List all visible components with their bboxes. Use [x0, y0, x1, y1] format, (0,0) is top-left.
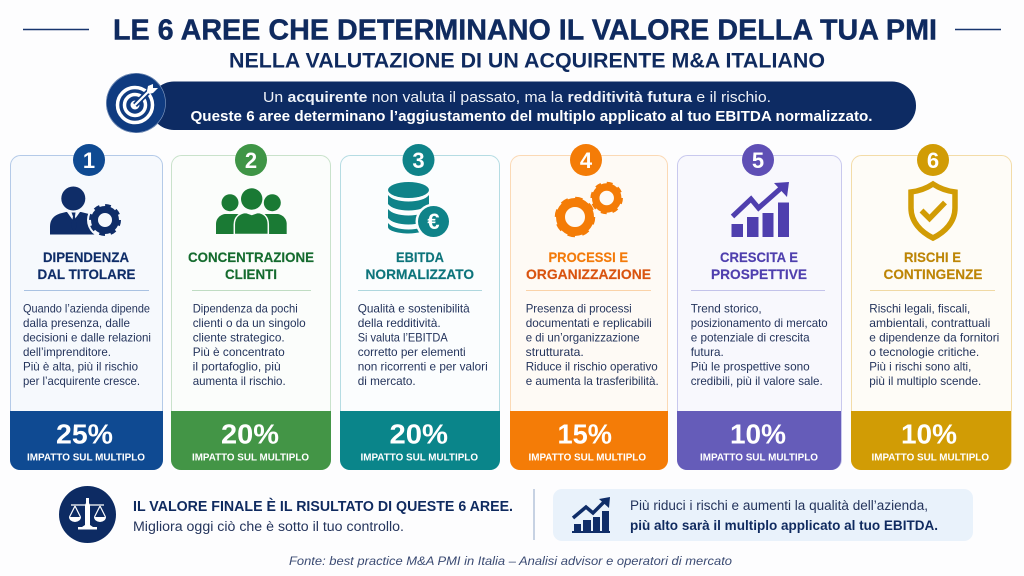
card body text: cliente strategico.: [193, 330, 285, 344]
badge 3: [402, 144, 434, 176]
callout text: più alto sarà il multiplo applicato al tuo EBITDA.: [630, 518, 938, 533]
card body text: futura.: [691, 345, 724, 359]
icon: gears: [557, 184, 621, 235]
card body text: Riduce il rischio operativo: [526, 360, 658, 374]
title: LE 6 AREE CHE DETERMINANO IL VALORE DELLA TUA PMI: [113, 14, 937, 46]
card body text: [691, 302, 828, 388]
card body text: credibili, più il valore sale.: [691, 374, 823, 388]
card body text: Dipendenza da pochi: [193, 302, 298, 316]
card heading: PROSPETTIVE: [711, 266, 807, 282]
icon: target: [106, 73, 166, 133]
closing statement: [133, 498, 513, 534]
card body text: [358, 302, 488, 388]
panel: rischi e contingenze: [851, 144, 1012, 470]
impact band 25%: 25%: [56, 418, 113, 450]
card body text: e dipendenze da fornitori: [869, 330, 999, 344]
icon: person with gear: [50, 186, 123, 238]
card heading: CLIENTI: [225, 266, 277, 282]
icon: shield with check: [911, 184, 955, 238]
card body text: [526, 302, 659, 388]
badge 1: [73, 144, 105, 176]
card body text: documentati e replicabili: [526, 316, 652, 330]
card body text: aumenta il rischio.: [193, 374, 286, 388]
impact band 25%: [10, 411, 163, 470]
banner text line 2: Queste 6 aree determinano l’aggiustamento del multiplo applicato al tuo EBITDA normalizzato.: [190, 108, 873, 125]
icon: chart: [572, 497, 610, 533]
badge 4: [570, 144, 602, 176]
impact band 10%: 10%: [901, 418, 957, 450]
card body text: [193, 302, 306, 388]
card body text: e aumenta la trasferibilità.: [526, 374, 659, 388]
card body text: clienti o da un singolo: [193, 316, 306, 330]
badge 5: [742, 144, 774, 176]
impact band 10%: IMPATTO SUL MULTIPLO: [700, 452, 818, 464]
card heading: [711, 249, 807, 282]
impact band 10%: [851, 411, 1011, 470]
badge 6: [917, 144, 949, 176]
panel: processi e organizzazione: [510, 144, 668, 470]
panel: ebitda normalizzato: [340, 144, 500, 470]
closing statement: Migliora oggi ciò che è sotto il tuo controllo.: [133, 519, 404, 534]
impact band 10%: [677, 411, 841, 470]
card body text: Più è concentrato: [193, 345, 285, 359]
subtitle: NELLA VALUTAZIONE DI UN ACQUIRENTE M&A ITALIANO: [229, 48, 825, 72]
card body text: per l’acquirente cresce.: [23, 374, 140, 388]
card body text: Qualità e sostenibilità: [358, 302, 470, 316]
banner text line 1: Un acquirente non valuta il passato, ma la redditività futura e il rischio.: [263, 89, 771, 106]
impact band 20%: [171, 411, 331, 470]
card body text: e di un’organizzazione: [526, 330, 640, 344]
card body text: [869, 302, 999, 388]
impact band 15%: IMPATTO SUL MULTIPLO: [528, 452, 646, 464]
card heading: RISCHI E: [904, 249, 961, 265]
card body text: il portafoglio, più: [193, 360, 281, 374]
icon: coins with euro: €: [427, 209, 440, 234]
card body text: Trend storico,: [691, 302, 762, 316]
card heading: ORGANIZZAZIONE: [526, 266, 651, 282]
card body text: Più le prospettive sono: [691, 360, 810, 374]
card heading: EBITDA: [396, 249, 444, 265]
impact band 10%: IMPATTO SUL MULTIPLO: [872, 452, 989, 464]
closing statement: IL VALORE FINALE È IL RISULTATO DI QUESTE 6 AREE.: [133, 498, 513, 515]
badge 3: 3: [412, 148, 425, 173]
icon: coins with euro: [388, 182, 452, 240]
badge 5: 5: [752, 148, 764, 173]
card heading: NORMALIZZATO: [366, 266, 474, 282]
callout text: [630, 498, 938, 533]
card heading: PROCESSI E: [548, 249, 628, 265]
icon: growth chart: [732, 182, 789, 237]
card heading: [526, 249, 651, 282]
card body text: decisioni e dalle relazioni: [23, 330, 151, 344]
card body text: Più è alta, più il rischio: [23, 360, 138, 374]
card body text: non ricorrenti e per valori: [358, 360, 488, 374]
card heading: DAL TITOLARE: [38, 266, 136, 282]
card heading: [188, 249, 314, 282]
card heading: CONTINGENZE: [884, 266, 982, 282]
impact band 20%: [340, 411, 500, 470]
impact band 20%: IMPATTO SUL MULTIPLO: [192, 452, 309, 464]
panel: crescita e prospettive: [677, 144, 842, 470]
card body text: Quando l’azienda dipende: [23, 302, 150, 316]
callout: multiple: [553, 489, 973, 541]
impact band 20%: 20%: [221, 418, 279, 450]
card body text: dell’imprenditore.: [23, 345, 111, 359]
impact band 15%: [510, 411, 668, 470]
card body text: ambientali, contrattuali: [869, 316, 990, 330]
callout text: Più riduci i rischi e aumenti la qualità dell’azienda,: [630, 498, 928, 513]
card body text: Più i rischi sono alti,: [869, 360, 971, 374]
card heading: CONCENTRAZIONE: [188, 249, 314, 265]
impact band 15%: 15%: [558, 418, 612, 450]
card body text: Presenza di processi: [526, 302, 632, 316]
card body text: strutturata.: [526, 345, 584, 359]
intro banner: [150, 82, 916, 130]
impact band 20%: 20%: [390, 418, 448, 450]
impact band 10%: 10%: [730, 418, 786, 450]
card body text: di mercato.: [358, 374, 416, 388]
card heading: [38, 249, 136, 282]
card body text: [23, 302, 151, 388]
card body text: corretto per elementi: [358, 345, 466, 359]
card body text: Si valuta l’EBITDA: [358, 330, 448, 344]
badge 1: 1: [83, 148, 95, 173]
badge 2: 2: [245, 148, 257, 173]
card heading: [884, 249, 982, 282]
card body text: Rischi legali, fiscali,: [869, 302, 970, 316]
card body text: o tecnologie critiche.: [869, 345, 979, 359]
badge 4: 4: [580, 148, 593, 173]
impact band 20%: IMPATTO SUL MULTIPLO: [360, 452, 478, 464]
card heading: [366, 249, 474, 282]
panel: concentrazione clienti: [171, 144, 331, 470]
impact band 25%: IMPATTO SUL MULTIPLO: [27, 452, 145, 464]
card body text: posizionamento di mercato: [691, 316, 828, 330]
icon: scales: [59, 486, 116, 543]
card body text: più il multiplo scende.: [869, 374, 981, 388]
card heading: DIPENDENZA: [43, 249, 129, 265]
icon: group of people: [216, 188, 287, 234]
source note: Fonte: best practice M&A PMI in Italia – Analisi advisor e operatori di mercato: [289, 556, 733, 568]
card body text: dalla presenza, dalle: [23, 316, 130, 330]
panel: dipendenza dal titolare: [10, 144, 163, 470]
card heading: CRESCITA E: [720, 249, 798, 265]
badge 6: 6: [927, 148, 939, 173]
card body text: della redditività.: [358, 316, 441, 330]
badge 2: [235, 144, 267, 176]
card body text: e potenziale di crescita: [691, 330, 810, 344]
